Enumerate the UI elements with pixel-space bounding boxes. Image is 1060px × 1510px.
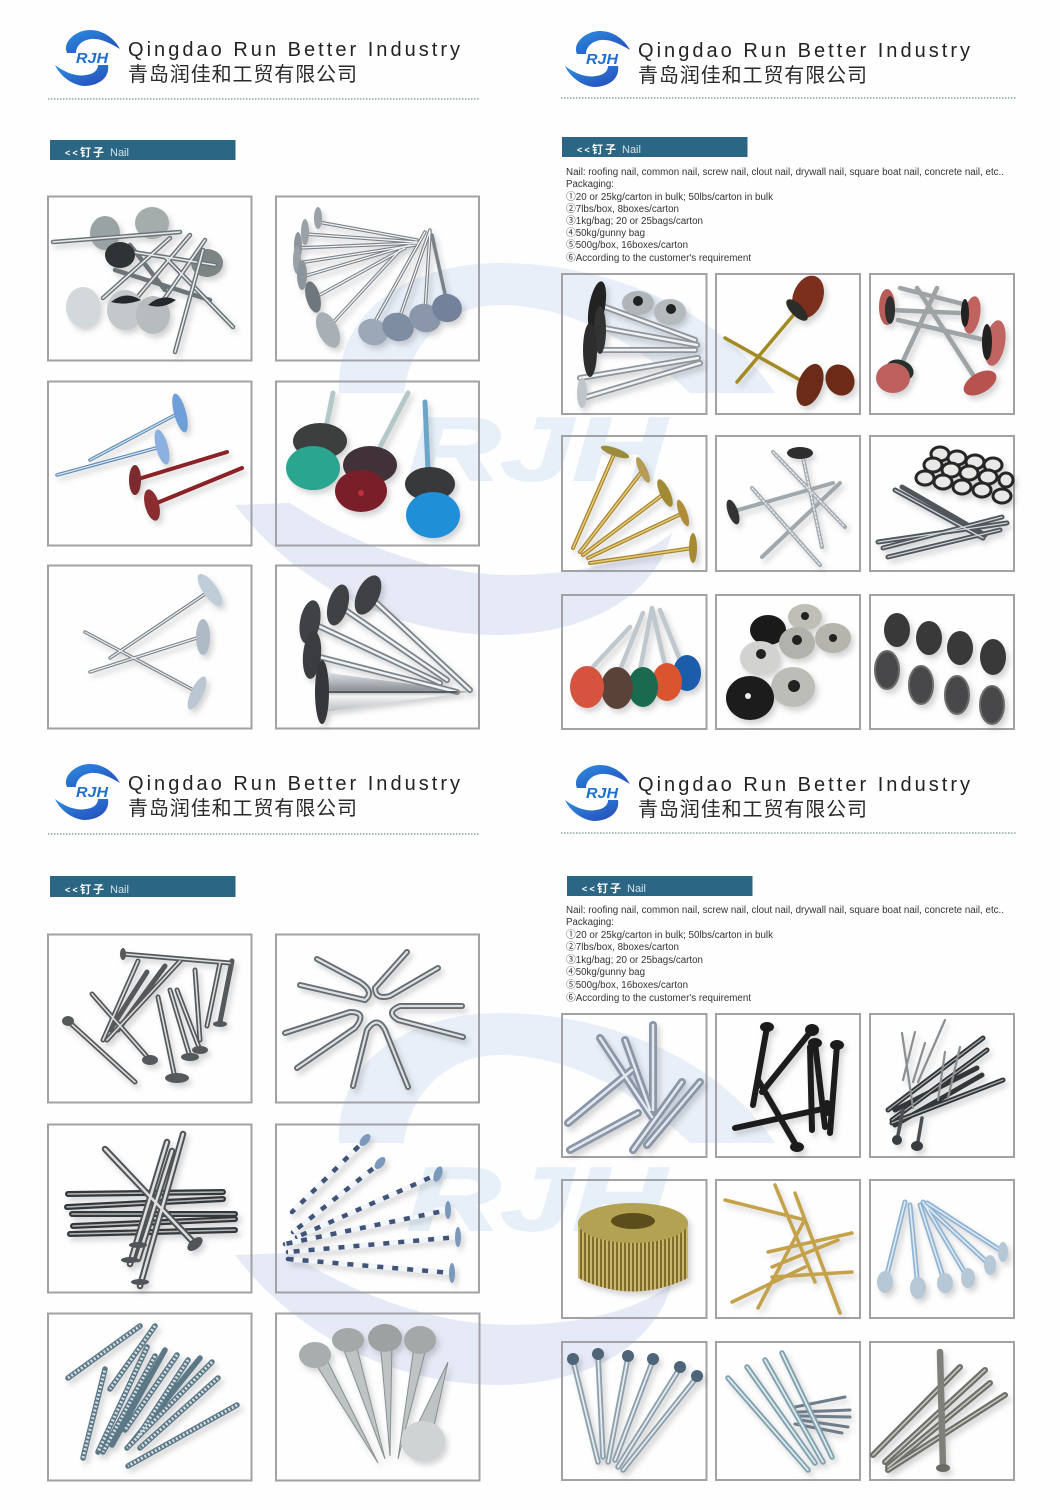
panel: washers and screw nails [870, 436, 1014, 571]
section banner: bottom left: Nail [110, 884, 129, 896]
panel: dark head twisted nails [276, 566, 479, 728]
header: bottom left [48, 764, 479, 834]
section banner: top left [50, 140, 236, 160]
section banner: top right: < [577, 145, 582, 155]
panel: gold coil nails [562, 1180, 706, 1318]
panel: silver annular nails [716, 436, 860, 571]
description text: bottom right: ①20 or 25kg/carton in bulk; 50lbs/carton in bulk [566, 929, 774, 941]
logo [565, 31, 630, 87]
description text: bottom right: ⑥According to the customer's requirement [566, 992, 751, 1004]
panel: grey masonry nails [870, 1342, 1014, 1480]
watermark: lower RJH logo [235, 1013, 775, 1385]
description text: top right [566, 167, 1004, 264]
logo: RJH [586, 51, 619, 68]
panel: gold twisted nails [562, 436, 706, 571]
panel: spiral shank nails [276, 1124, 479, 1292]
header: top left: 青岛润佳和工贸有限公司 [128, 63, 357, 86]
washers [916, 447, 1013, 503]
logo: RJH [76, 50, 109, 67]
panel: gold nails with brown washers [716, 271, 860, 414]
panel: row of zinc nails [562, 1342, 706, 1480]
description text: top right: ②7lbs/box, 8boxes/carton [566, 203, 679, 215]
section banner: bottom right: 钉 [597, 881, 608, 895]
header: top left [48, 30, 479, 99]
company name: Qingdao Run Better Industry [638, 774, 970, 796]
section banner: bottom right [567, 876, 752, 896]
section banner: bottom right: < [590, 884, 595, 894]
description text: bottom right: ⑤500g/box, 16boxes/carton [566, 979, 688, 991]
section banner: top left: Nail [110, 147, 129, 159]
panel: silver roofing nail pile [48, 196, 252, 360]
description text: top right: Nail: roofing nail, common nail, screw nail, clout nail, drywall nail, square boat nail, concrete nail, etc.. [566, 167, 1004, 178]
panel: blue and red roofing nails [48, 382, 252, 546]
logo [55, 764, 120, 820]
panel: black drywall screws [716, 1014, 860, 1157]
section banner: bottom left: 钉 [80, 882, 91, 896]
header: top right: 青岛润佳和工贸有限公司 [638, 64, 867, 87]
panel: bright common nails [48, 934, 252, 1102]
company name: Qingdao Run Better Industry [128, 773, 460, 795]
logo: RJH [586, 785, 619, 802]
panel: three silver umbrella nails [48, 566, 252, 728]
panel: coloured umbrella head nails [276, 382, 479, 546]
company name: Qingdao Run Better Industry [638, 40, 970, 62]
watermark: upper RJH logo: RJH [407, 400, 669, 500]
section banner: top right: < [584, 145, 590, 155]
header: top right [561, 31, 1016, 98]
watermark: lower RJH logo: RJH [407, 1150, 669, 1250]
description text: bottom right: ④50kg/gunny bag [566, 966, 645, 978]
section banner: top left: 子 [93, 146, 104, 159]
panel: twisted roofing nail fan [276, 196, 479, 360]
panel: steel washers [716, 595, 860, 729]
panel: red washer nails [870, 274, 1014, 414]
description text: bottom right [566, 905, 1004, 1004]
section banner: top right [562, 137, 748, 157]
panel: double head duplex nails [48, 1124, 252, 1292]
panel: concrete nails silver [562, 1014, 706, 1157]
panel: U-shaped staples [276, 934, 479, 1102]
description text: bottom right: ③1kg/bag; 20 or 25bags/carton [566, 954, 703, 966]
description text: top right: ⑤500g/box, 16boxes/carton [566, 239, 688, 251]
panel: colourful head nails row [562, 595, 706, 729]
logo [565, 765, 630, 821]
panel: screw shank nails [48, 1314, 252, 1480]
section banner: top right: 钉 [592, 142, 603, 156]
panel: clout nails with large heads [276, 1314, 480, 1480]
panel: crossed zinc nails [716, 1342, 860, 1480]
section banner: top right: 子 [605, 143, 616, 156]
description text: top right: ③1kg/bag; 20 or 25bags/carton [566, 215, 703, 227]
description text: bottom right: Nail: roofing nail, common nail, screw nail, clout nail, drywall nail, square boat nail, concrete nail, etc.. [566, 905, 1004, 916]
section banner: bottom right: < [582, 884, 587, 894]
section banner: top left: < [65, 148, 70, 158]
section banner: bottom left: 子 [93, 883, 104, 896]
header: bottom right [561, 765, 1016, 833]
description text: top right: ①20 or 25kg/carton in bulk; 50lbs/carton in bulk [566, 191, 774, 203]
description text: top right: ⑥According to the customer's requirement [566, 252, 751, 264]
logo: RJH [76, 784, 109, 801]
section banner: top left: < [72, 148, 78, 158]
panel: gold long nails [716, 1180, 860, 1318]
section banner: bottom right: 子 [610, 882, 621, 895]
section banner: bottom left: < [65, 885, 70, 895]
section banner: bottom left: < [72, 885, 78, 895]
description text: top right: Packaging: [566, 179, 614, 190]
panel: flat head blue nails [870, 1180, 1014, 1318]
section banner: top left: 钉 [80, 145, 91, 159]
section banner: bottom right: Nail [627, 883, 646, 895]
section banner: top right: Nail [622, 144, 641, 156]
description text: top right: ④50kg/gunny bag [566, 227, 645, 239]
panel: EPDM washer twisted nails [562, 274, 706, 414]
header: bottom right: 青岛润佳和工贸有限公司 [638, 798, 867, 821]
section banner: bottom left [50, 876, 236, 897]
description text: bottom right: ②7lbs/box, 8boxes/carton [566, 941, 679, 953]
panel: black rubber washers [870, 595, 1014, 729]
panel: mixed steel wire nails [870, 1014, 1014, 1157]
description text: bottom right: Packaging: [566, 917, 614, 928]
logo [55, 30, 120, 86]
header: bottom left: 青岛润佳和工贸有限公司 [128, 797, 357, 820]
watermark: upper RJH logo [235, 263, 775, 635]
company name: Qingdao Run Better Industry [128, 39, 460, 61]
